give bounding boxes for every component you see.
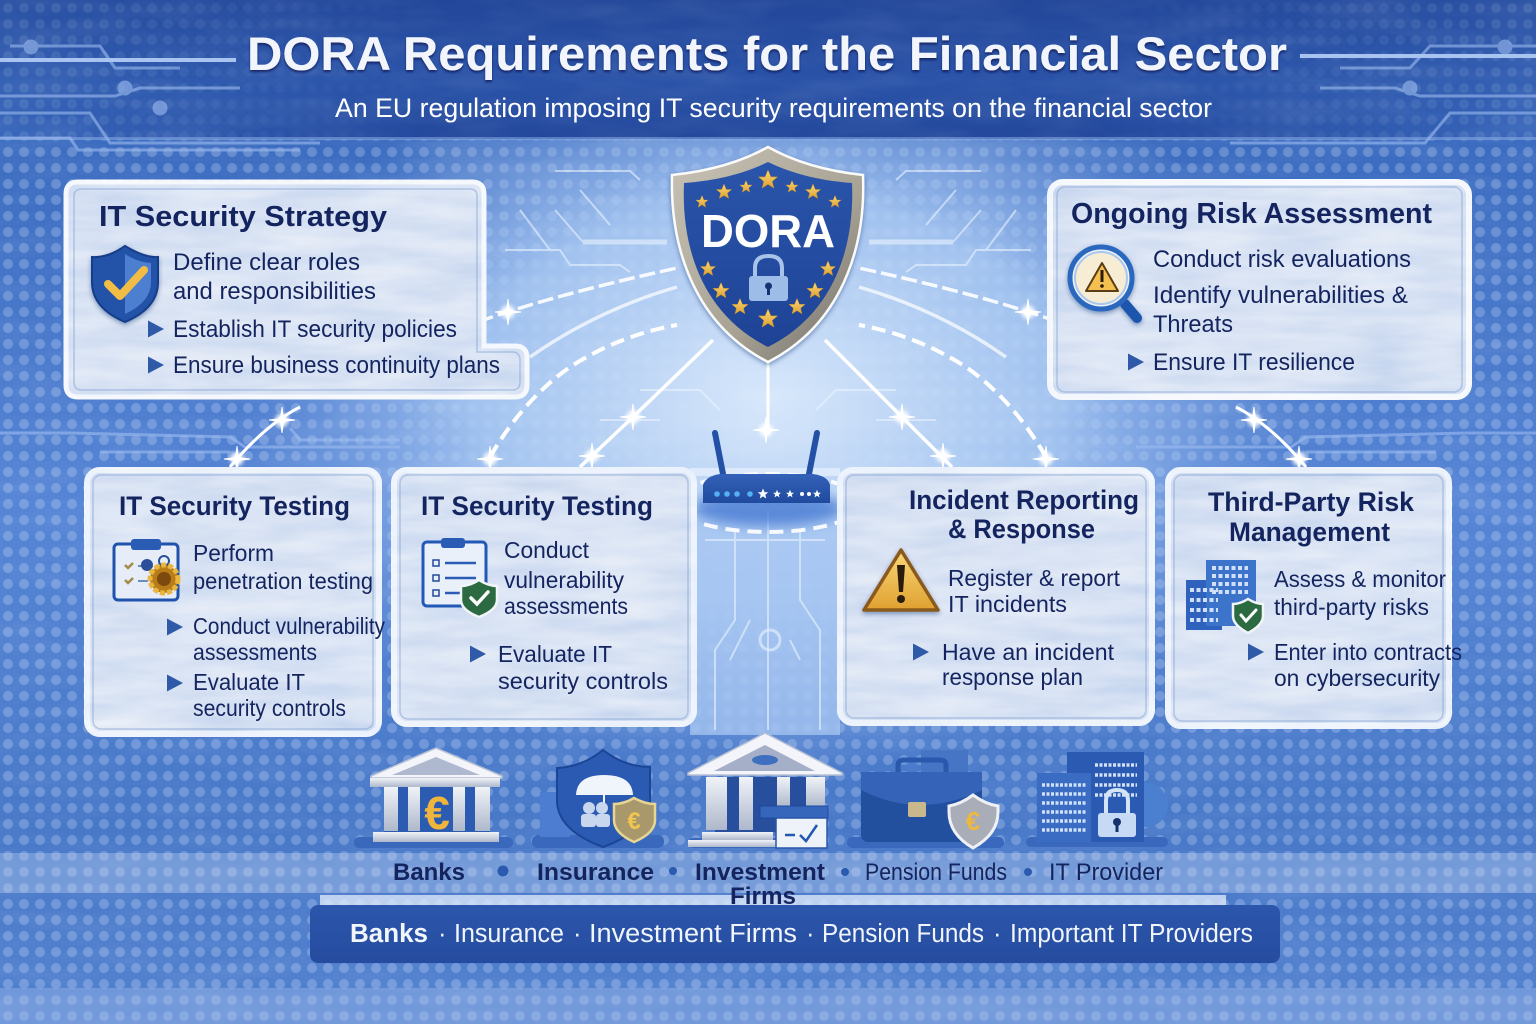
- icon: investment firm: [688, 733, 842, 848]
- bullet: evaluate: [470, 641, 668, 694]
- title: DORA Requirements for the Financial Sector: [247, 27, 1287, 80]
- text: register: IT incidents: [948, 591, 1067, 617]
- panel: IT Security Testing (assessments): [394, 470, 694, 724]
- bottom banner: [310, 895, 1280, 963]
- bullet: evaluate: security controls: [498, 668, 668, 694]
- panel: Incident Reporting & Response: [840, 470, 1152, 723]
- separator dot: [1024, 868, 1032, 876]
- bullet: vulnerability: Conduct vulnerability: [193, 613, 385, 639]
- panel: IT Security Strategy: [66, 182, 527, 397]
- panel: Third-Party Risk Management: [1168, 470, 1462, 726]
- icon: router: [674, 433, 862, 532]
- heading: Management: [1229, 517, 1390, 547]
- circuit traces in header: [0, 41, 1536, 452]
- bullet: policies: Establish IT security policies: [173, 316, 457, 343]
- bullet: controls: [167, 669, 346, 721]
- icon: pension briefcase: [847, 750, 1004, 848]
- heading: IT Security Testing: [421, 491, 653, 521]
- text: assess: [1274, 566, 1446, 620]
- heading: [1208, 487, 1414, 547]
- icon: insurance: €: [627, 808, 641, 835]
- text: register: Register & report: [948, 565, 1120, 591]
- bottom banner: ·: [806, 920, 814, 948]
- title rule right: [1300, 54, 1536, 58]
- bullet: contracts: Enter into contracts: [1274, 639, 1462, 665]
- bullet: contracts: on cybersecurity: [1274, 665, 1440, 691]
- text: penetration: Perform: [193, 540, 274, 566]
- heading: & Response: [948, 514, 1095, 544]
- subtitle: An EU regulation imposing IT security requirements on the financial sector: [335, 93, 1212, 123]
- label: IT Provider: IT Provider: [1049, 859, 1163, 886]
- heading: [909, 485, 1139, 544]
- text: evaluations: Conduct risk evaluations: [1153, 246, 1411, 273]
- text: vulnerability assessments: [504, 537, 628, 619]
- label: Investment Firms: Firms: [730, 883, 796, 910]
- central column backdrop: [690, 468, 840, 735]
- label: Banks: Banks: [393, 859, 465, 886]
- bottom banner: Insurance: [454, 920, 564, 948]
- bottom banner: ·: [438, 920, 446, 948]
- bullet: controls: Evaluate IT: [193, 669, 305, 695]
- separator dot: [498, 866, 508, 876]
- icon: magnifier warning: [1070, 247, 1137, 318]
- icon: clipboard with gear: [114, 539, 178, 600]
- icon: checklist with shield: [423, 538, 497, 617]
- text: assess: third-party risks: [1274, 594, 1429, 620]
- bottom banner: Pension Funds: [822, 920, 984, 948]
- panel: IT Security Testing (penetration): [87, 470, 385, 734]
- bottom banner: ·: [993, 920, 1002, 948]
- text: vulnerability assessments: assessments: [504, 593, 628, 619]
- heading: Third-Party Risk: [1208, 487, 1414, 517]
- label: Investment Firms: [695, 859, 825, 910]
- text: penetration: penetration testing: [193, 568, 373, 594]
- label: Investment Firms: Investment: [695, 859, 825, 886]
- heading: IT Security Testing: [119, 491, 350, 521]
- bullet: continuity: Ensure business continuity plans: [173, 352, 500, 379]
- icon: warning triangle: [864, 550, 938, 610]
- separator dot: [669, 867, 677, 875]
- bullet: evaluate: Evaluate IT: [498, 641, 612, 667]
- separator dot: [841, 868, 849, 876]
- icon: IT provider server: [1026, 752, 1168, 847]
- bullet: resilience: Ensure IT resilience: [1153, 349, 1355, 376]
- text: roles: [173, 249, 376, 305]
- icon: building with shield: [1186, 560, 1263, 633]
- text: vulnerability assessments: vulnerability: [504, 567, 624, 593]
- panel: Ongoing Risk Assessment: [1050, 182, 1469, 397]
- icon: insurance: [532, 750, 664, 848]
- text: vulnerabilities: [1153, 282, 1408, 338]
- icon: padlock: [749, 256, 788, 301]
- text: penetration: [193, 540, 373, 594]
- emblem text: DORA: [701, 205, 835, 257]
- bullet: vulnerability: assessments: [193, 639, 317, 665]
- heading: IT Security Strategy: [99, 201, 387, 233]
- faint circuit texture around the shield: [505, 171, 1031, 420]
- stars: [696, 170, 841, 327]
- bottom banner: ·: [573, 920, 582, 948]
- text: vulnerability assessments: Conduct: [504, 537, 589, 563]
- bottom banner: Investment Firms: [589, 920, 797, 948]
- icon: bank: [354, 748, 513, 848]
- title rule left: [0, 58, 236, 62]
- text: roles: Define clear roles: [173, 249, 360, 276]
- bullet: plan: response plan: [942, 664, 1083, 690]
- heading: Ongoing Risk Assessment: [1071, 198, 1432, 230]
- text: vulnerabilities: Identify vulnerabilities &: [1153, 282, 1408, 309]
- text: roles: and responsibilities: [173, 278, 376, 305]
- bullet: contracts: [1248, 639, 1462, 691]
- heading: Incident Reporting: [909, 485, 1139, 515]
- bottom banner: Important IT Providers: [1010, 920, 1253, 948]
- bullet: plan: [913, 639, 1114, 690]
- text: register: [948, 565, 1120, 617]
- icon: pension briefcase: €: [966, 806, 980, 836]
- bottom banner: Banks: [350, 920, 428, 948]
- text: assess: Assess & monitor: [1274, 566, 1446, 592]
- network arcs and rays: [224, 240, 1312, 472]
- bullet: vulnerability: [167, 613, 385, 665]
- emblem: DORA shield: [672, 147, 863, 362]
- bullet: plan: Have an incident: [942, 639, 1114, 665]
- icon: shield check: [92, 246, 158, 322]
- text: vulnerabilities: Threats: [1153, 311, 1233, 338]
- icon: bank: €: [424, 787, 450, 839]
- label: Pension Funds: Pension Funds: [865, 859, 1007, 886]
- label: Insurance: Insurance: [537, 859, 654, 886]
- bullet: controls: security controls: [193, 695, 346, 721]
